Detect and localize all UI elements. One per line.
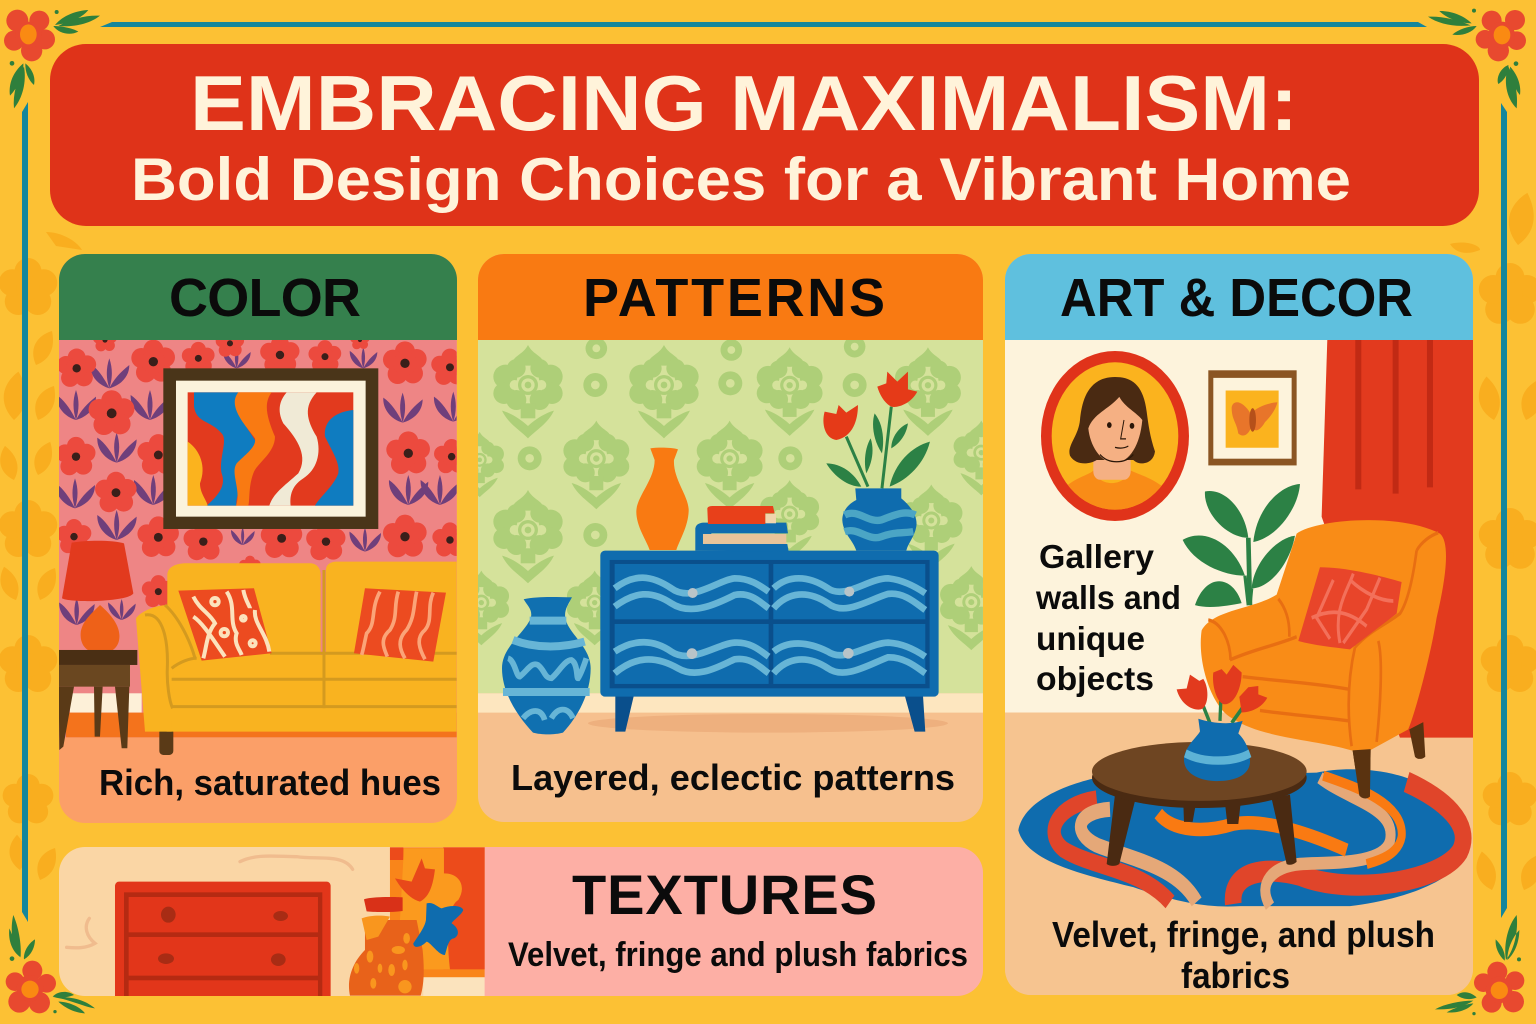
text: gallery walls and unique objects [1035, 538, 1181, 697]
text: gallery walls and unique objects: objects [1036, 660, 1154, 697]
tulips in blue vase [823, 372, 930, 551]
illustration: living room with sofa [56, 328, 473, 755]
floor [1005, 738, 1473, 995]
corner flower: bottom left [6, 915, 95, 1013]
heading: textures: TEXTURES [572, 863, 877, 926]
caption: velvet, fringe, and plush fabrics: Velvet, fringe, and plush [1052, 914, 1435, 955]
potted plant leaves [1183, 484, 1300, 607]
table lamp [62, 541, 133, 653]
title banner [50, 44, 1479, 226]
text: gallery walls and unique objects: walls and [1035, 579, 1181, 616]
panel: art and decor [1005, 254, 1473, 1001]
illustration: gallery wall and armchair [1005, 340, 1473, 1001]
small framed butterfly [1208, 370, 1297, 465]
abstract wall art [390, 847, 485, 996]
red dresser [114, 882, 331, 996]
illustration: red dresser and vase [65, 847, 485, 996]
text: gallery walls and unique objects: Gallery [1039, 538, 1155, 575]
side floral wallpaper [0, 191, 1536, 893]
panel: patterns [454, 254, 1009, 822]
caption: velvet, fringe, and plush fabrics: fabrics [1181, 955, 1290, 996]
picture frame with abstract art [163, 368, 378, 529]
panel: textures [59, 847, 983, 996]
illustration: blue dresser with vases [454, 336, 1009, 734]
orange vase [636, 448, 689, 550]
caption: textures: Velvet, fringe and plush fabrics [508, 936, 968, 974]
text: gallery walls and unique objects: unique [1036, 620, 1145, 657]
panel: color [56, 254, 473, 823]
oval portrait [1041, 351, 1189, 521]
corner flower: top right [1428, 9, 1526, 108]
heading: art and decor: ART & DECOR [1060, 268, 1413, 328]
swirled rug [1018, 769, 1470, 907]
tulips in small blue vase [1177, 665, 1267, 781]
corner flower: top left [4, 10, 100, 108]
caption: color: Rich, saturated hues [99, 762, 441, 803]
coffee table [1092, 742, 1307, 866]
armchair front leg over rug [1353, 749, 1371, 798]
stacked books [695, 506, 789, 552]
heading: patterns: PATTERNS [583, 268, 885, 328]
orange speckled vase [349, 897, 424, 996]
side table [59, 650, 137, 750]
corner flower: bottom right [1435, 915, 1524, 1015]
caption: velvet, fringe, and plush fabrics [1052, 920, 1433, 988]
blue star flower [413, 903, 463, 955]
heading: color: COLOR [169, 268, 361, 328]
caption: patterns: Layered, eclectic patterns [511, 757, 955, 798]
curtain [1322, 340, 1473, 738]
title: EMBRACING MAXIMALISM: [190, 59, 1298, 147]
armchair [1201, 520, 1446, 798]
sofa [136, 562, 457, 755]
dresser [600, 551, 939, 732]
subtitle: Bold Design Choices for a Vibrant Home [131, 146, 1351, 213]
large patterned floor vase [502, 597, 591, 734]
